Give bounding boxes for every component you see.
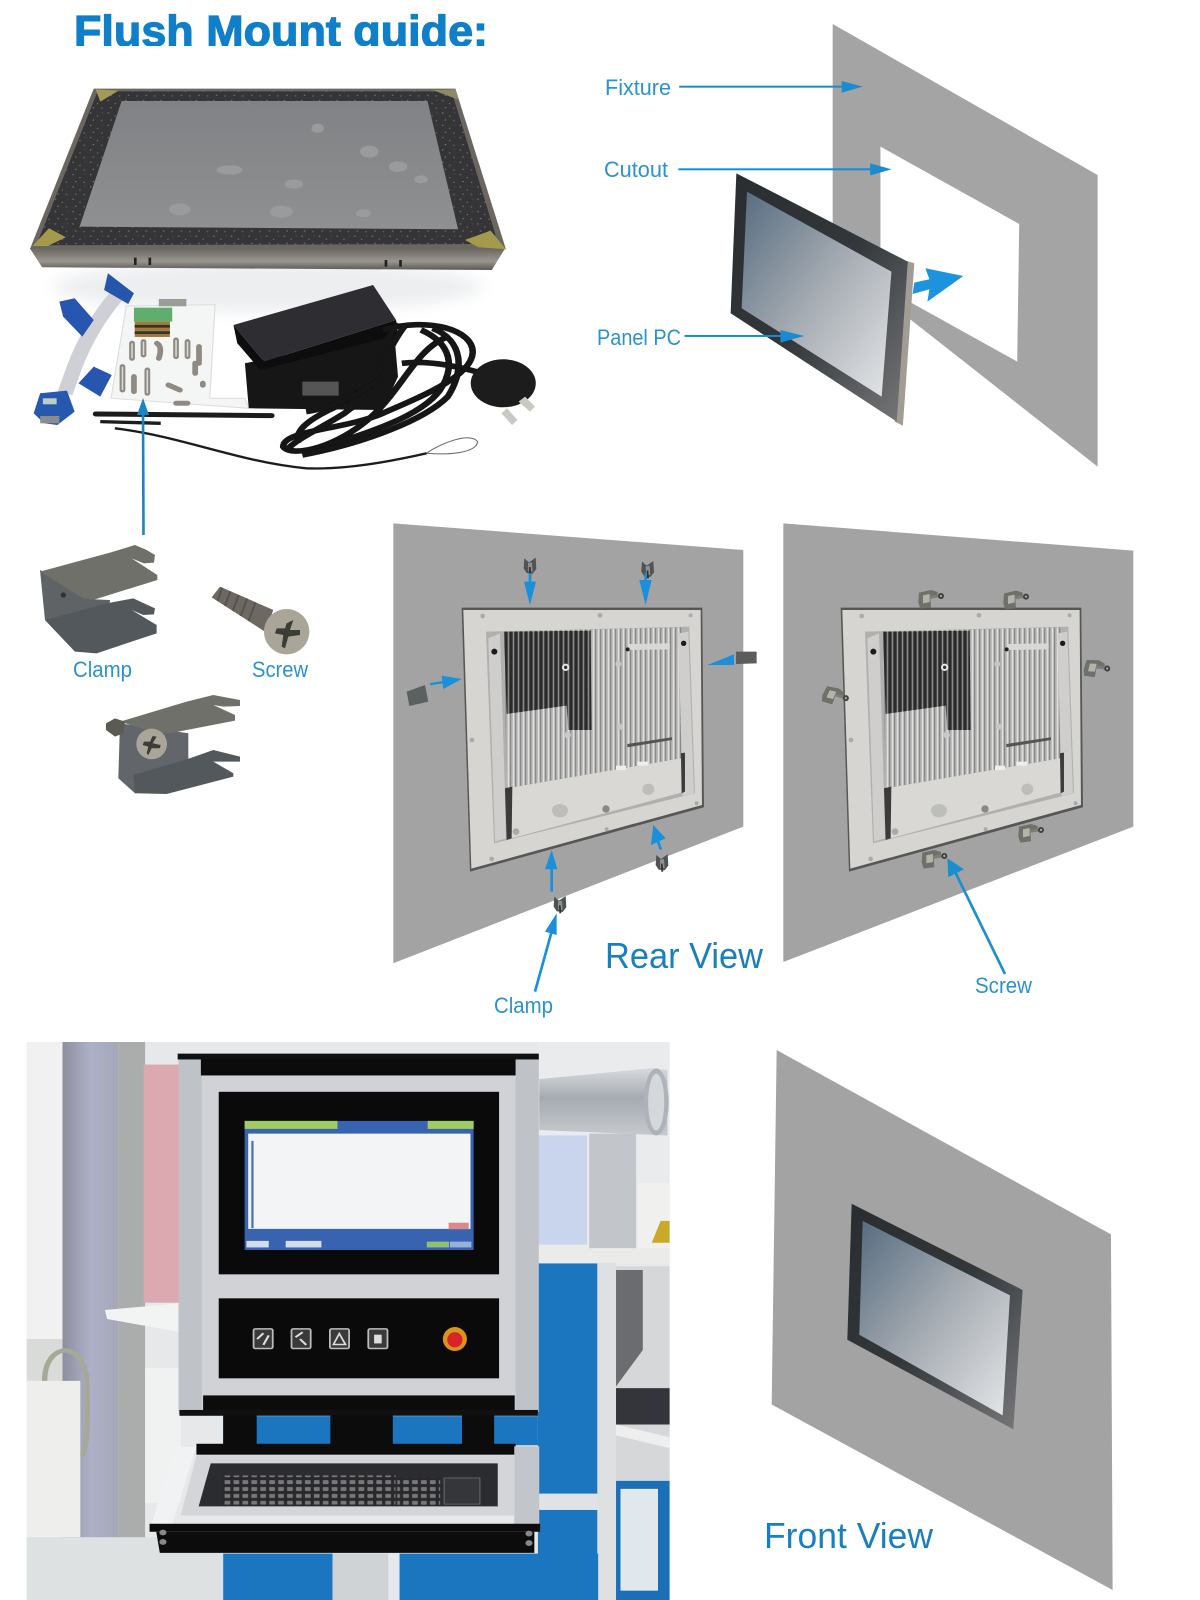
fixed clamps	[820, 590, 1112, 869]
shadow under monitor	[54, 262, 482, 312]
clamp with screw	[106, 695, 240, 794]
blue connectors	[104, 273, 134, 304]
title: Flush Mount guide:	[74, 7, 488, 56]
panel PC bezel	[847, 1204, 1023, 1429]
power adapter	[245, 333, 398, 410]
label: Clamp: Clamp	[73, 657, 132, 682]
panel PC screen	[859, 1221, 1010, 1415]
label: Cutout: Cutout	[604, 157, 668, 182]
arrow: fixture	[679, 81, 863, 93]
insertion arrows	[430, 573, 734, 892]
clamps	[407, 558, 757, 913]
accessories	[34, 273, 536, 469]
diagram: front view of flush-mounted panel	[772, 1050, 1113, 1590]
stylus	[96, 414, 272, 416]
arrow: cutout	[678, 163, 891, 175]
diagram: rear view with clamp arrows	[393, 523, 757, 992]
background	[27, 1042, 670, 1600]
keyboard tray	[150, 1444, 540, 1553]
label: Panel PC: Panel PC	[597, 325, 681, 350]
control panel	[219, 1298, 499, 1378]
photo: installed industrial cabinet	[27, 1042, 670, 1600]
clamp callout arrow	[535, 913, 557, 992]
screw	[212, 585, 309, 654]
power cables	[283, 323, 482, 455]
support arms	[223, 1415, 494, 1445]
wall plate	[783, 523, 1133, 962]
wall plate	[772, 1050, 1113, 1590]
plug	[471, 359, 536, 407]
label: Screw callout: Screw	[975, 973, 1032, 998]
wall plate	[393, 523, 743, 963]
arrow: panel PC	[685, 330, 804, 343]
big blue arrow	[913, 268, 963, 302]
terminal block	[134, 308, 172, 322]
cabinet frame	[178, 1054, 539, 1416]
label: Fixture: Fixture	[605, 75, 671, 100]
screws	[122, 340, 203, 403]
heading: Rear View: Rear View	[605, 935, 764, 976]
label: Screw: Screw	[252, 657, 308, 682]
label: Clamp callout: Clamp	[494, 993, 553, 1018]
clamp	[40, 545, 157, 653]
screw callout arrow	[947, 858, 1005, 974]
monitor body	[30, 89, 506, 270]
parts: clamp and screw	[40, 545, 309, 794]
ribbon cable	[65, 293, 119, 393]
panel PC rear	[841, 608, 1083, 872]
panel PC	[731, 173, 914, 426]
touch screen	[219, 1092, 499, 1274]
fixture plate with cutout	[833, 24, 1098, 467]
panel PC rear	[462, 608, 704, 872]
diagram: rear view with clamps fixed	[783, 523, 1133, 974]
arrow: from accessories to clamp	[137, 398, 149, 535]
heading: Front View: Front View	[764, 1515, 934, 1556]
lanyard	[115, 428, 427, 469]
photo: panel PC with accessories	[30, 89, 536, 469]
diagram: fixture, cutout and panel PC	[678, 24, 1098, 467]
